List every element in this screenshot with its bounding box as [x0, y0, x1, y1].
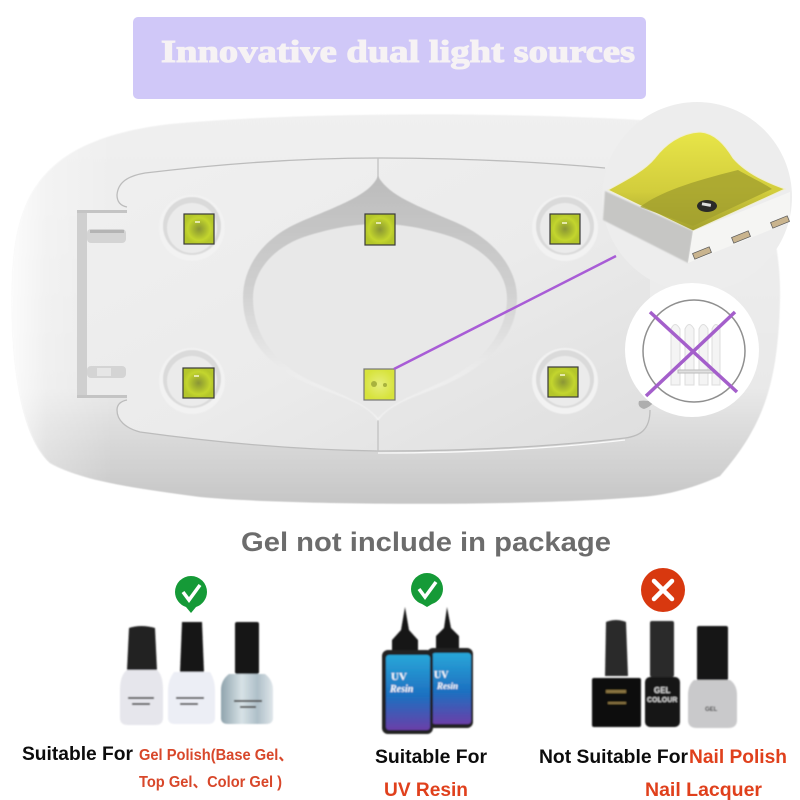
chip left face [603, 191, 693, 263]
callout: LED chip close-up [602, 102, 792, 292]
LED chips [183, 214, 580, 400]
label: not suitable [539, 747, 787, 800]
label: suitable gel polish: Top Gel、Color Gel ) [139, 774, 282, 791]
lamp device [12, 114, 780, 504]
chip darker cup [640, 170, 772, 226]
nail polish bottles: GEL [705, 707, 718, 713]
top and bottom seam [377, 158, 379, 451]
tube lamps [671, 324, 720, 385]
LED bezel rings [159, 195, 598, 414]
chip right face [688, 192, 790, 263]
left edge highlight [12, 118, 300, 503]
UV resin bottles: UV [391, 671, 407, 683]
gel bottles [120, 622, 273, 725]
central oval recess [243, 176, 517, 421]
lamp inner plate [77, 158, 650, 451]
label: suitable UV resin [375, 747, 488, 800]
title banner: Innovative dual light sources [161, 33, 635, 69]
chip contact pads [693, 216, 789, 259]
label: not suitable: Not Suitable For [539, 747, 689, 768]
pointer line [394, 256, 616, 369]
cross mark [646, 312, 737, 396]
icon: red cross [641, 568, 685, 612]
group: nail polish [539, 568, 787, 800]
nail polish bottles [592, 620, 737, 728]
label: suitable UV resin: Suitable For [375, 747, 488, 768]
UV resin bottles: UV [434, 670, 449, 681]
label: suitable gel polish: Gel Polish(Base Gel、 [139, 747, 293, 764]
subtitle: Gel not include in package [241, 527, 611, 557]
UV resin bottles [382, 607, 473, 734]
icon: green check [175, 576, 207, 613]
UV resin bottles: Resin [389, 684, 414, 695]
right notch [639, 401, 654, 409]
plate outline [117, 158, 650, 451]
UV resin bottles: Resin [436, 681, 458, 691]
icon: green check [411, 573, 443, 607]
lamp body shell [12, 114, 780, 504]
label: suitable gel polish [22, 744, 293, 791]
nail polish bottles: GEL [654, 686, 671, 695]
left hinge slot [77, 210, 127, 398]
chip die [697, 200, 717, 212]
group: UV resin [375, 573, 488, 800]
title banner [133, 17, 646, 99]
plate lower highlight [378, 440, 625, 453]
chip yellow dome [608, 132, 785, 231]
label: not suitable: Nail Polish [689, 747, 787, 768]
label: suitable gel polish: Suitable For [22, 744, 134, 765]
group: gel polish [22, 576, 293, 791]
nail polish bottles: COLOUR [647, 697, 677, 704]
callout: no fluorescent tubes [625, 283, 759, 417]
